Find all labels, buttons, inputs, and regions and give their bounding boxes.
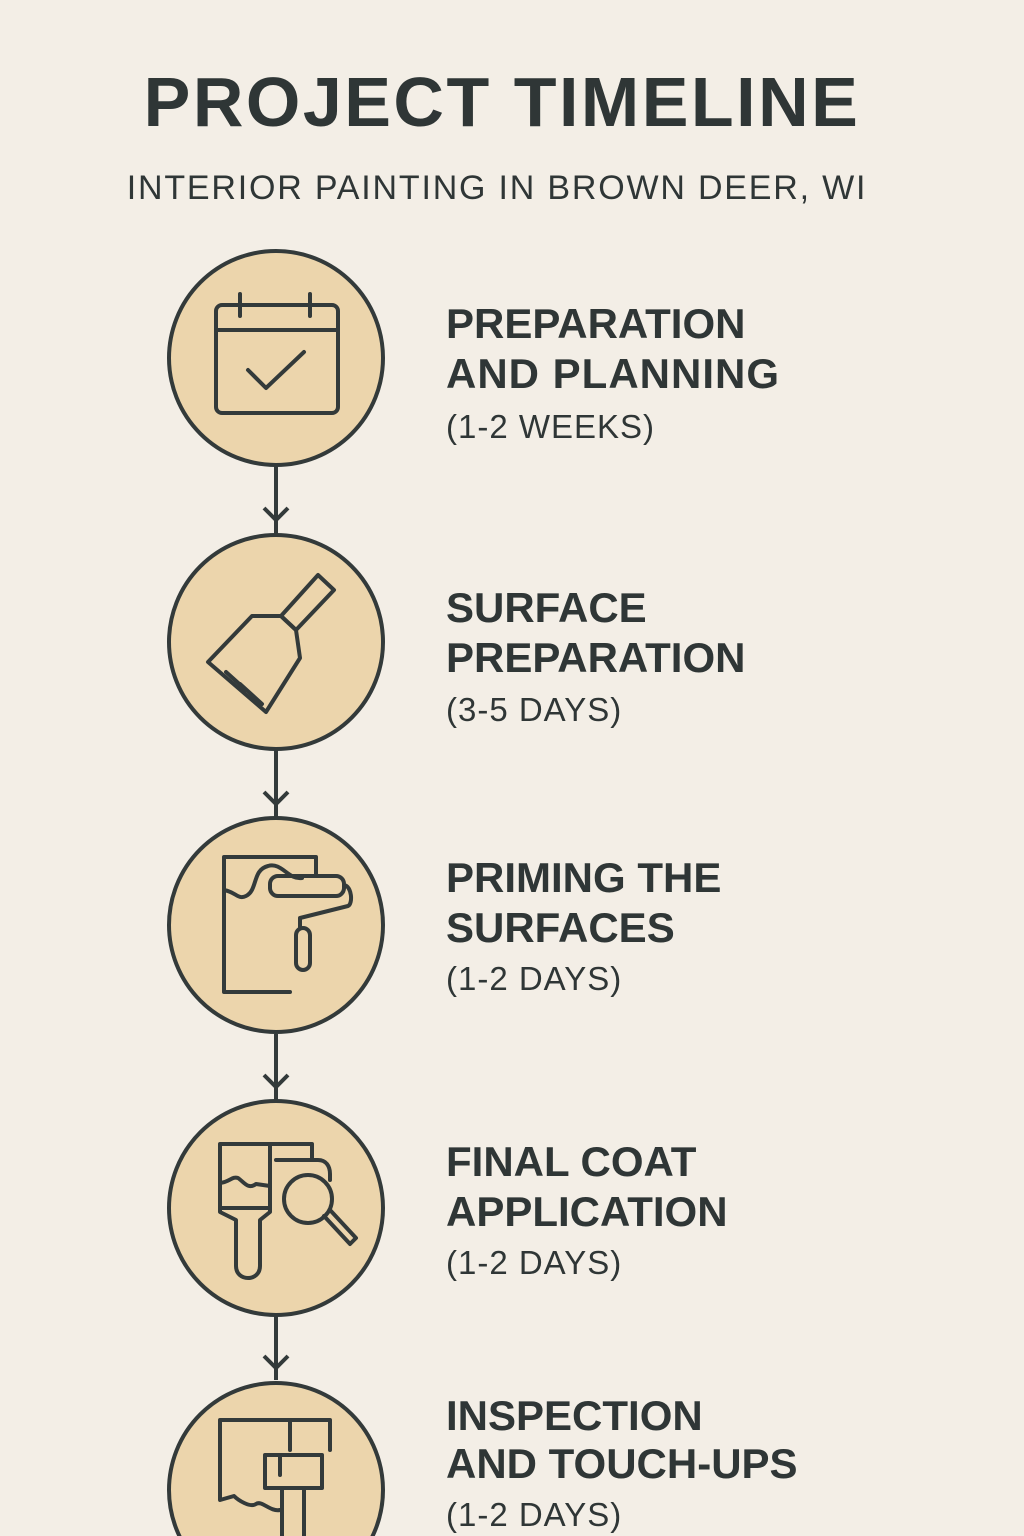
step texts: (1-2 DAYS) <box>446 1244 622 1281</box>
step texts: PREPARATION <box>446 634 745 681</box>
step texts: FINAL COAT <box>446 1138 697 1185</box>
step texts: AND TOUCH-UPS <box>446 1440 798 1487</box>
step texts: (1-2 DAYS) <box>446 960 622 997</box>
step 2 icon: brush <box>169 535 383 749</box>
step texts: SURFACE <box>446 584 647 631</box>
step texts: PRIMING THE <box>446 854 721 901</box>
step texts: (1-2 DAYS) <box>446 1496 622 1533</box>
step 1 icon: calendar <box>169 251 383 465</box>
step texts: (1-2 WEEKS) <box>446 408 655 445</box>
title: PROJECT TIMELINE <box>144 63 860 141</box>
step 3 icon: roller <box>169 818 383 1032</box>
step 4 icon: brush with magnifier <box>169 1101 383 1315</box>
step texts <box>446 300 798 1533</box>
step texts: PREPARATION <box>446 300 745 347</box>
step texts: SURFACES <box>446 904 675 951</box>
step texts: AND PLANNING <box>446 350 780 397</box>
arrows <box>264 466 288 1380</box>
step texts: APPLICATION <box>446 1188 728 1235</box>
step texts: INSPECTION <box>446 1392 703 1439</box>
step texts: (3-5 DAYS) <box>446 691 622 728</box>
step 5 icon: wall with brush <box>169 1383 383 1536</box>
subtitle: INTERIOR PAINTING IN BROWN DEER, WI <box>127 169 867 207</box>
